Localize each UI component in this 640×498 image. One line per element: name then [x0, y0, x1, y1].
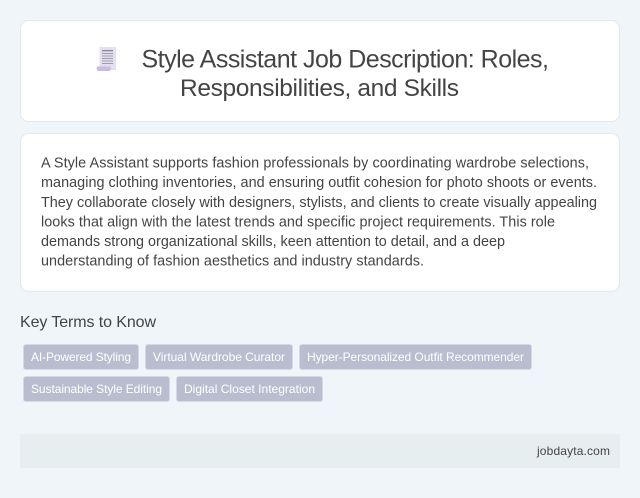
icon: scroll document: [97, 47, 116, 71]
text block: description: demands strong organizational skills, keen attention to detail, and a deep: [41, 234, 505, 250]
panel: description card: [20, 134, 620, 292]
tag: Virtual Wardrobe Curator: Virtual Wardrobe Curator: [153, 350, 285, 364]
tag: Virtual Wardrobe Curator: [146, 344, 292, 370]
text block: description: They collaborate closely with designers, stylists, and clients to create visually appealing: [41, 195, 597, 211]
text block: description: understanding of fashion aesthetics and industry standards.: [41, 254, 424, 270]
title: [142, 46, 549, 102]
tag: Hyper-Personalized Outfit Recommender: Hyper-Personalized Outfit Recommender: [307, 350, 524, 364]
text block: description: [41, 156, 597, 270]
heading: key terms: Key Terms to Know: [20, 314, 156, 331]
text block: description: A Style Assistant supports fashion professionals by coordinating wardrobe selections,: [41, 156, 589, 172]
tag: Hyper-Personalized Outfit Recommender: [300, 344, 532, 370]
tag: Sustainable Style Editing: [24, 376, 170, 402]
tag: Digital Closet Integration: Digital Closet Integration: [184, 382, 315, 396]
text block: description: looks that align with the latest trends and specific project requirements. This role: [41, 214, 555, 230]
footer bar: [20, 434, 620, 468]
title: Responsibilities, and Skills: [180, 75, 459, 102]
footer source text: jobdayta.com: [536, 444, 610, 458]
panel: header card: [20, 20, 620, 122]
title: Style Assistant Job Description: Roles,: [142, 46, 549, 74]
tag: AI-Powered Styling: AI-Powered Styling: [31, 350, 131, 364]
tag: Digital Closet Integration: [176, 376, 322, 402]
text block: description: managing clothing inventories, and ensuring outfit cohesion for photo shoots or events.: [41, 175, 597, 191]
tag: AI-Powered Styling: [24, 344, 138, 370]
tag: Sustainable Style Editing: Sustainable Style Editing: [31, 382, 162, 396]
